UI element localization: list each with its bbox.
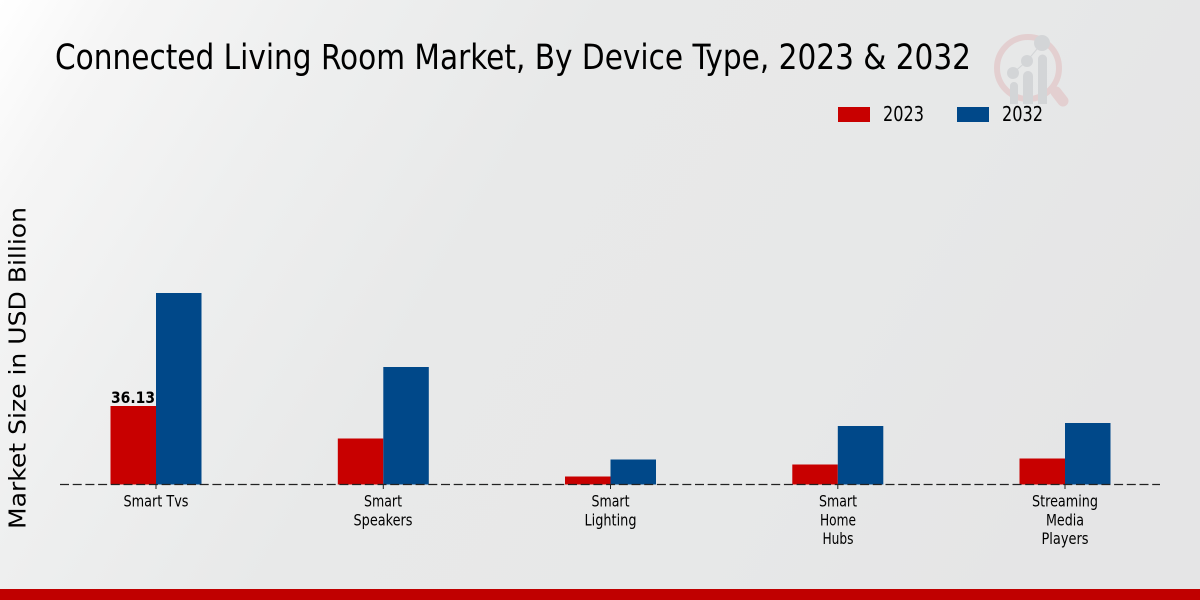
data label: 36.13 [111,388,155,407]
category labels [124,492,1098,548]
group: Smart Lighting [565,460,656,484]
group: Smart Speakers [338,367,429,484]
legend: 2023: 2023 [883,102,924,126]
legend: 2032: 2032 [1002,102,1043,126]
category labels: Speakers [354,510,412,530]
category labels: Smart [364,492,402,510]
category labels: Hubs [822,529,854,548]
category labels: Home [820,510,856,530]
group: Smart Tvs [110,293,202,484]
x axis baseline [60,484,1160,489]
y axis label: Market Size in USD Billion [4,207,32,529]
category labels: Lighting [584,510,636,530]
bar chart [60,293,1160,548]
legend: 2023 [838,102,924,126]
legend: 2032 [957,102,1043,126]
group: Streaming Media Players [1020,423,1110,484]
category labels: Smart [592,492,630,510]
watermark logo icon [997,35,1063,104]
legend [838,102,1043,126]
group: Smart Home Hubs [792,426,883,484]
category labels: Smart [819,492,857,510]
category labels: Smart Tvs [124,492,188,510]
footer bar [0,589,1200,600]
category labels: Media [1046,510,1084,530]
category labels: Players [1042,529,1088,548]
title: Connected Living Room Market, By Device Type, 2023 & 2032 [55,38,971,78]
category labels: Streaming [1032,492,1098,510]
